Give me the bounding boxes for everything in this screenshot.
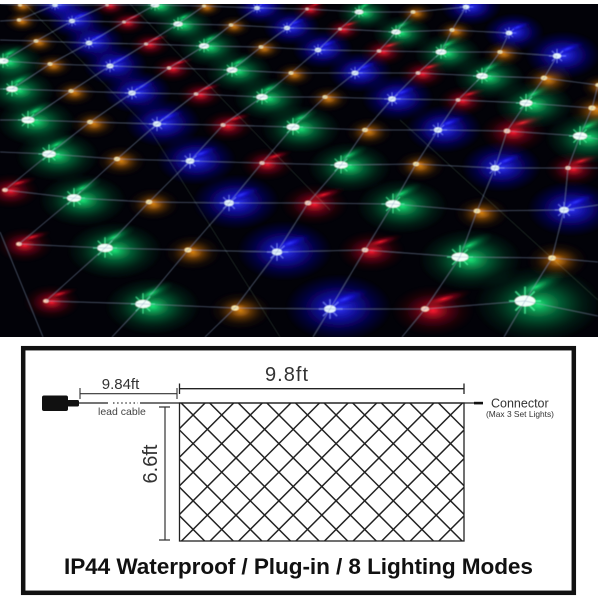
icon: plug — [42, 396, 79, 411]
wood floor plank lines — [25, 4, 598, 337]
label: max sets: (Max 3 Set Lights) — [486, 409, 554, 419]
net diagram — [178, 402, 465, 542]
icon: connector end — [474, 402, 483, 404]
label: connector: Connector — [491, 396, 549, 410]
dimension: 9.84ft: 9.84ft — [102, 376, 140, 393]
dimension: 9.8ft: 9.8ft — [265, 364, 308, 386]
label: lead cable: lead cable — [98, 406, 146, 418]
dimension: 9.84ft — [80, 376, 177, 399]
dimension: 6.6ft — [140, 407, 170, 540]
caption: IP44 Waterproof / Plug-in / 8 Lighting Modes — [64, 554, 533, 579]
lead cable line — [79, 402, 474, 404]
lead cable dots — [113, 402, 138, 404]
net wires — [0, 4, 598, 337]
diagram panel border — [23, 348, 574, 593]
dimension: 9.8ft — [180, 364, 464, 394]
photo: multicolor LED net lights — [0, 0, 600, 343]
LED lights — [0, 0, 600, 343]
dimension: 6.6ft: 6.6ft — [140, 444, 162, 483]
